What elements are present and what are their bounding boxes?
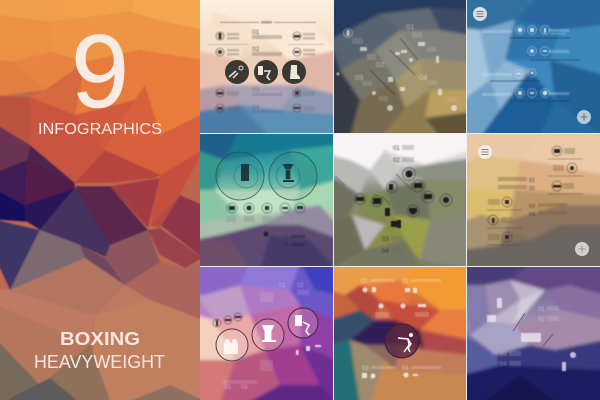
tile 4 icon row [227, 203, 305, 213]
tile 2 numbers: 04 [419, 73, 427, 82]
tile 3 shadow lines [490, 38, 580, 101]
tile 1 large icon: punching bag [254, 60, 278, 84]
tile 5 labels [391, 145, 414, 253]
tile 3 text rows [482, 29, 569, 96]
tile 9 numbers: 02 [538, 317, 545, 323]
tile 9 numbers [500, 307, 545, 368]
heading: heavyweight: HEAVYWEIGHT [34, 352, 165, 372]
tile 7 bubble: bag training [288, 308, 318, 338]
tile 2 numbers: 02 [376, 60, 384, 69]
tile 9 slashes [513, 313, 553, 346]
tile 1 background [195, 0, 337, 137]
tile 6 numbers: 02 [529, 186, 535, 192]
tile 7 bubble: champion [252, 319, 284, 351]
tile 2 numbers: 01 [406, 22, 414, 31]
tile 1 numbers: 04 [252, 104, 260, 111]
tile 2 numbers [355, 22, 427, 82]
tile 9 labels [509, 306, 559, 366]
heading: boxing: BOXING [60, 328, 140, 349]
tile 4 lower icon [264, 232, 268, 236]
tile 8 numbers: 01 [361, 279, 368, 285]
tile 8 bubble: boxer [385, 324, 419, 358]
tile 5 numbers [382, 146, 400, 255]
tile 7 numbers [224, 283, 304, 391]
tile 7 bubble: fighters [216, 329, 248, 361]
tile 8 numbers: 02 [402, 279, 409, 285]
tile 4 bubble: champion [269, 152, 317, 200]
tile 8 icons [362, 287, 426, 378]
tile 6 number text [498, 177, 567, 215]
tile 1 side labels [208, 33, 324, 111]
tile 8 numbers: 03 [362, 366, 369, 372]
tile 6 side labels [488, 148, 575, 240]
tile 8 background [330, 263, 470, 400]
tile 7 background [195, 263, 337, 400]
tile 6 icons [488, 146, 577, 242]
tile 7 numbers: 03 [224, 385, 231, 391]
panel: tile 9 lavender [463, 263, 600, 400]
tile 4 numbers [284, 234, 306, 246]
tile 7 white icons [296, 345, 321, 355]
panel: tile 4 teal [200, 134, 333, 266]
tile 5 numbers: 02 [393, 158, 400, 164]
tile 6 plus button [575, 242, 589, 256]
tile 2 background [330, 0, 470, 137]
tile 4 numbers: 03 [283, 234, 289, 240]
tile 4 labels [226, 216, 272, 222]
tile 9 background [463, 263, 600, 400]
tile 6 numbers: 01 [529, 178, 535, 184]
panel: tile 7 violet [195, 263, 337, 400]
tile 1 large icon: skipping rope [225, 60, 249, 84]
heading: infographics: INFOGRAPHICS [38, 121, 162, 138]
tile 5 numbers: 01 [393, 146, 400, 152]
cover polygon background [0, 0, 203, 400]
tile 1 numbers: 01 [252, 29, 260, 36]
tile 4 background [200, 134, 333, 266]
panel: tile 3 blue [463, 0, 600, 137]
tile 4 bubble: punching bag [216, 152, 264, 200]
tile 9 icons [487, 298, 576, 371]
tile 1 numbers [252, 29, 282, 113]
tile 2 icons [336, 28, 457, 111]
tile 1 numbers: 03 [252, 87, 260, 94]
tile 3 icon rows [515, 26, 550, 98]
tile 7 numbers: 02 [297, 283, 304, 289]
big number 9: 9 [71, 14, 129, 130]
tile 7 numbers: 01 [279, 283, 286, 289]
tile 6 background [463, 130, 600, 270]
tile 1 title [220, 21, 316, 24]
tile 4 numbers: 04 [283, 242, 289, 248]
tile 1 numbers: 02 [252, 46, 260, 53]
panel: tile 6 sand [463, 130, 600, 270]
tile 7 small icons [213, 313, 242, 327]
tile 5 icon cluster [354, 168, 452, 228]
tile 3 background [463, 0, 600, 137]
tile 5 divider [335, 174, 412, 205]
tile 6 shadow lines [487, 159, 583, 245]
tile 6 menu button [478, 145, 492, 159]
tile 2 dividers [370, 38, 418, 95]
panel: tile 5 olive [334, 134, 466, 266]
tile 6 numbers [529, 178, 535, 218]
panel: cover [0, 0, 203, 400]
tile 9 numbers: 01 [538, 307, 545, 313]
tile 5 numbers: 03 [382, 237, 389, 243]
tile 7 labels [223, 290, 309, 384]
panel: tile 2 dusk dome [330, 0, 470, 137]
tile 6 numbers: 03 [529, 204, 535, 210]
tile 1 small icons [216, 32, 301, 112]
tile 1 large icon: boot [282, 60, 306, 84]
tile 5 background [334, 134, 466, 266]
tile 3 menu button [473, 7, 487, 21]
tile 9 numbers: 04 [500, 362, 507, 368]
tile 2 numbers: 03 [355, 73, 363, 82]
tile 2 labels [352, 32, 456, 102]
tile 9 numbers: 03 [500, 352, 507, 358]
tile 7 numbers: 04 [241, 385, 248, 391]
tile 3 plus button [577, 110, 591, 124]
tile 8 labels [370, 279, 441, 369]
panel: tile 1 cream sunset [195, 0, 337, 137]
tile 8 numbers [361, 279, 409, 372]
panel: tile 8 orange [330, 263, 470, 400]
tile 8 numbers: 04 [402, 366, 409, 372]
tile 5 numbers: 04 [382, 249, 389, 255]
tile 6 numbers: 04 [529, 212, 535, 218]
